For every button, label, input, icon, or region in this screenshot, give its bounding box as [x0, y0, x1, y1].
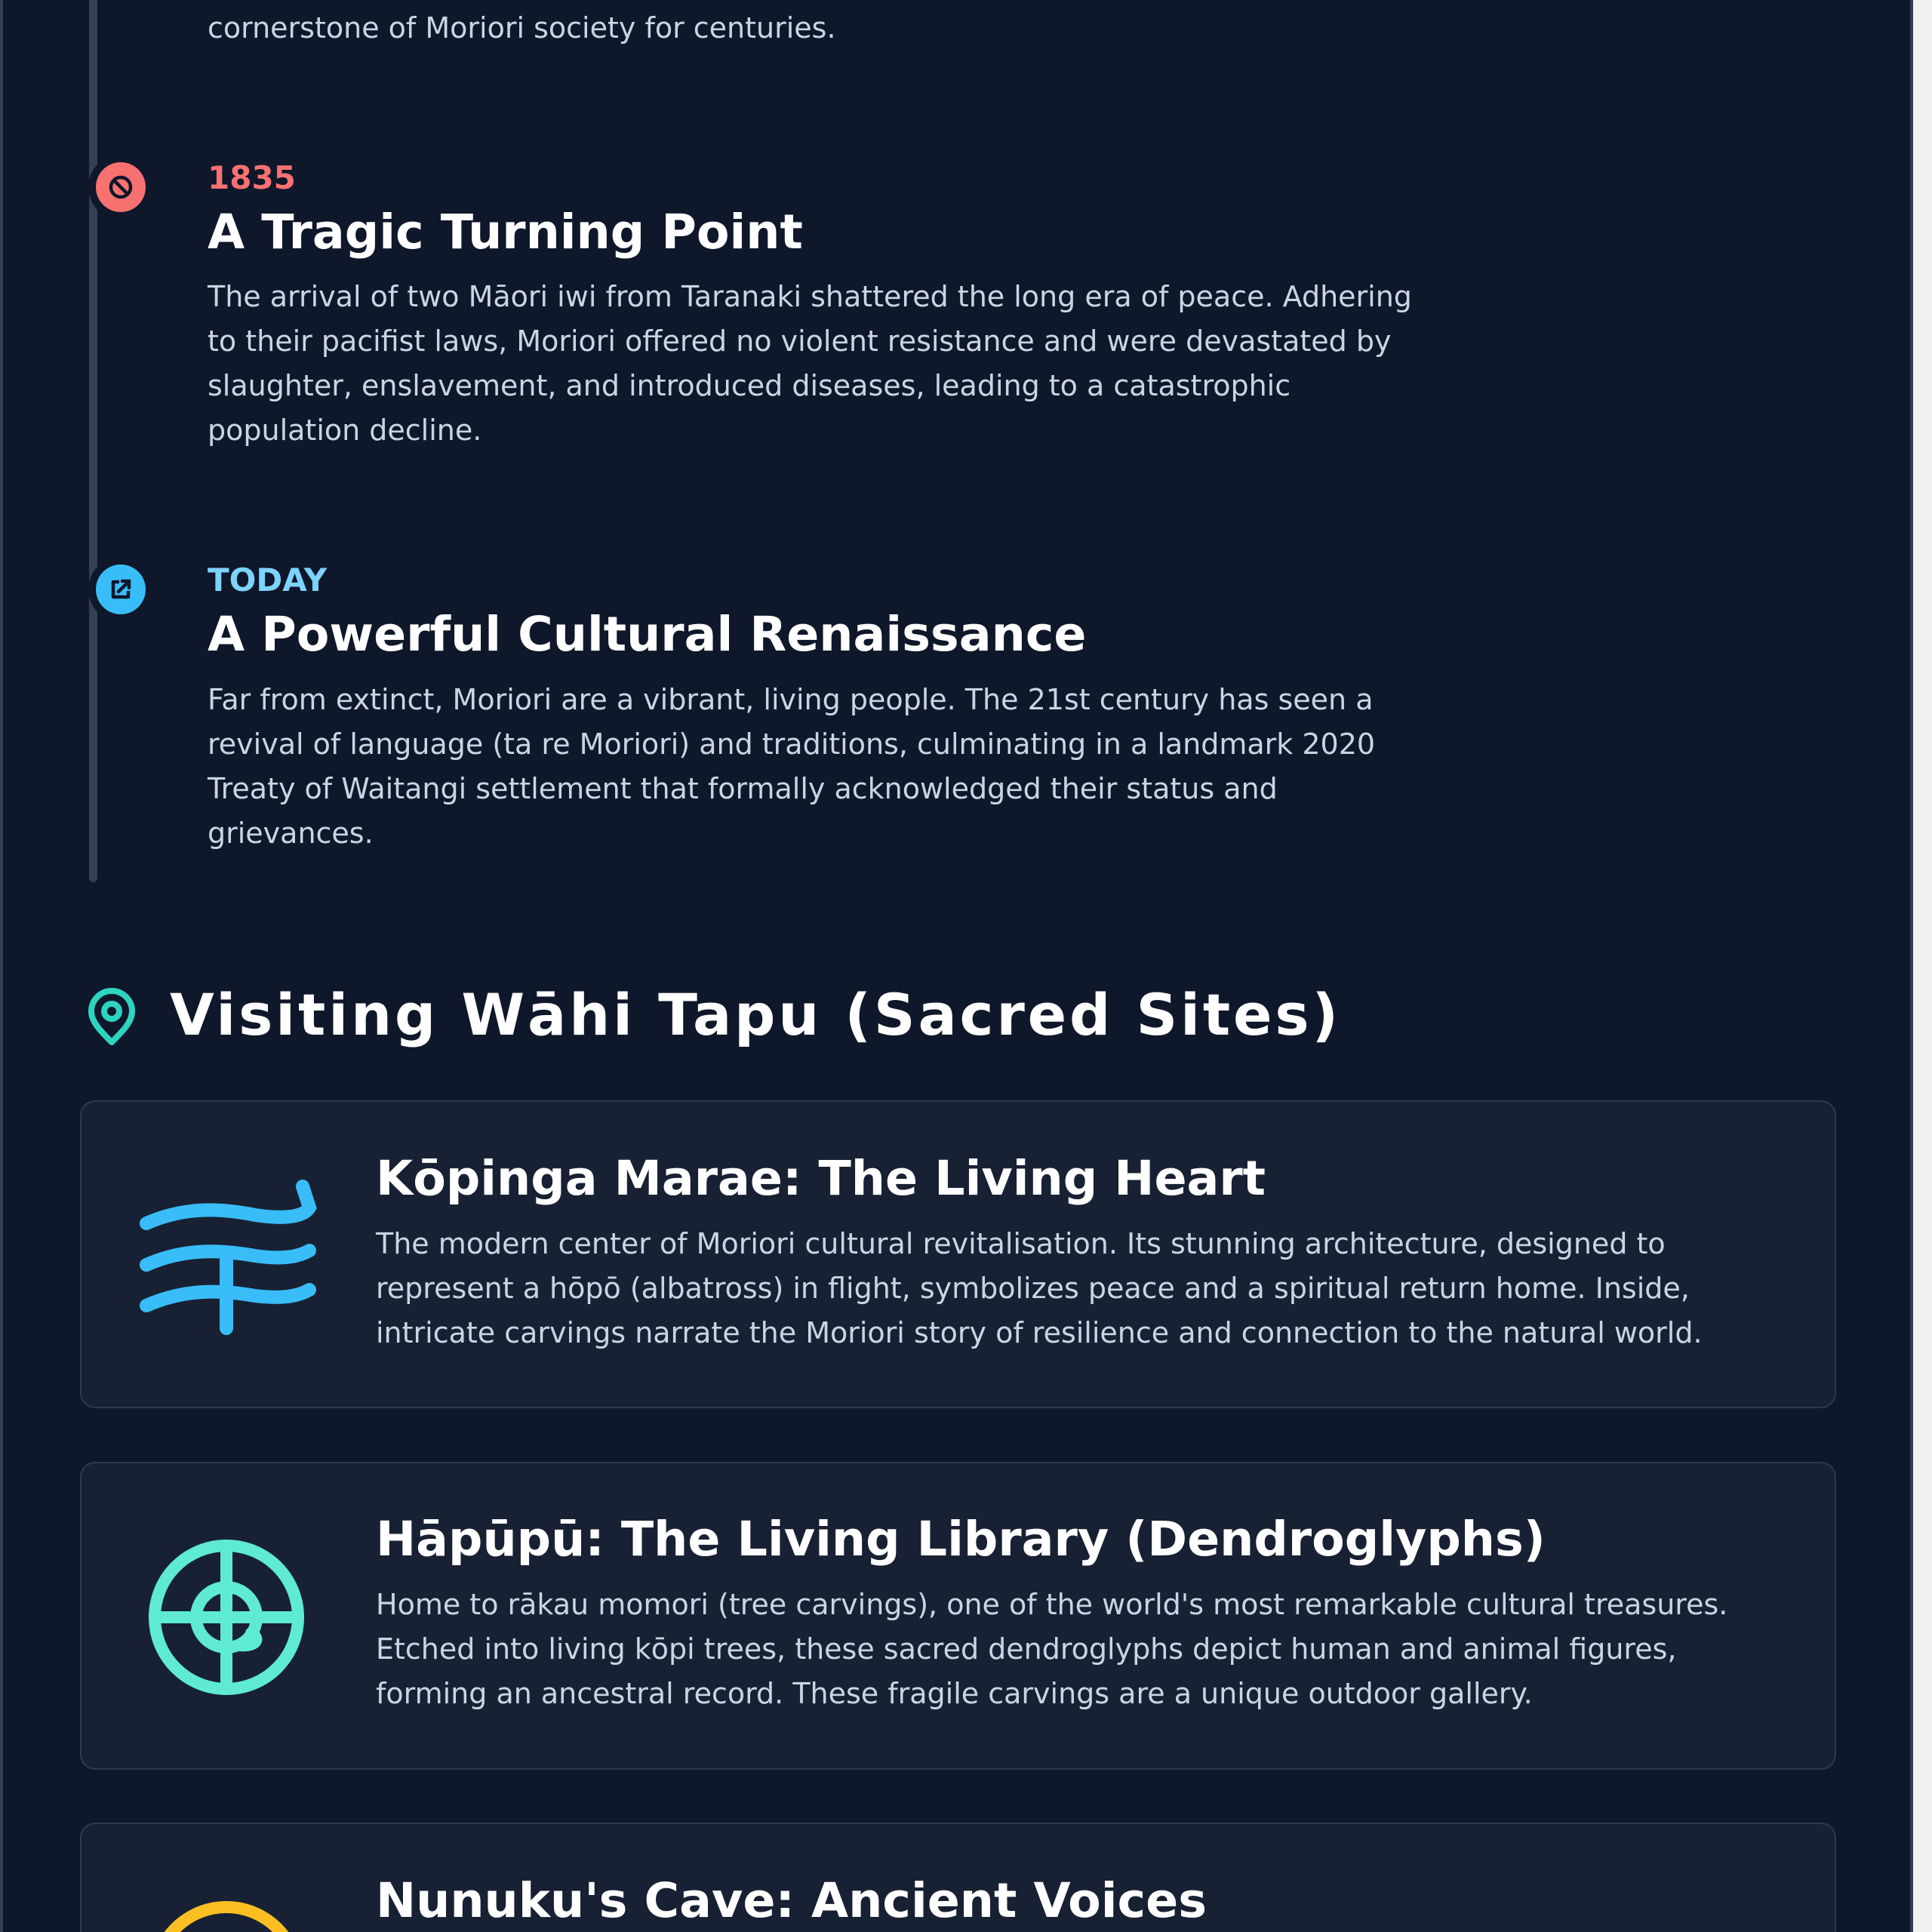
text: card 1: intricate carvings narrate the Moriori story of resilience and connection to the natural world.: [376, 1316, 1703, 1349]
heading: A Tragic Turning Point: A Tragic Turning Point: [208, 204, 803, 260]
text: card 2: [376, 1588, 1727, 1710]
text: 1835 description: population decline.: [208, 414, 481, 447]
text: today description: revival of language (ta re Moriori) and traditions, culminating in a landmark 2020: [208, 728, 1375, 761]
heading: card 1: Kōpinga Marae: The Living Heart: [376, 1150, 1266, 1206]
text: card 1: The modern center of Moriori cultural revitalisation. Its stunning architecture, designed to: [376, 1227, 1666, 1260]
text: previous entry ending: cornerstone of Moriori society for centuries.: [208, 11, 836, 45]
icon: cave circle: [165, 1901, 288, 1932]
card: Nunuku's Cave: [80, 1823, 1836, 1932]
card: Hapupu: [80, 1462, 1836, 1770]
text: today description: Treaty of Waitangi settlement that formally acknowledged their status and: [208, 772, 1278, 805]
timeline line: [89, 0, 97, 882]
icon: today external link: [96, 565, 146, 614]
label: TODAY: TODAY: [208, 561, 327, 598]
text: today description: grievances.: [208, 817, 374, 850]
heading: card 2: Hāpūpū: The Living Library (Dendroglyphs): [376, 1511, 1546, 1567]
text: 1835 description: slaughter, enslavement, and introduced diseases, leading to a catastrophic: [208, 369, 1291, 402]
text: 1835 description: to their pacifist laws, Moriori offered no violent resistance and were devastated by: [208, 325, 1391, 358]
text: today description: [207, 683, 1375, 850]
icon: 1835 ban: [96, 162, 146, 212]
icon: dendroglyph target: [149, 1540, 304, 1695]
label: 1835: 1835: [208, 159, 296, 196]
text: 1835 description: The arrival of two Māori iwi from Taranaki shattered the long era of peace. Adhering: [208, 280, 1412, 313]
text: card 2: Etched into living kōpi trees, these sacred dendroglyphs depict human and animal figures,: [376, 1632, 1676, 1666]
heading: card 3: Nunuku's Cave: Ancient Voices: [376, 1872, 1207, 1928]
text: 1835 description: [207, 280, 1412, 447]
icon: waves: [140, 1180, 317, 1335]
heading: A Powerful Cultural Renaissance: A Powerful Cultural Renaissance: [208, 606, 1087, 662]
card: Kopinga Marae: [80, 1100, 1836, 1408]
section heading: Visiting Wāhi Tapu (Sacred Sites): [170, 981, 1341, 1048]
text: today description: Far from extinct, Moriori are a vibrant, living people. The 21st century has seen a: [208, 683, 1373, 716]
icon: location pin: [88, 988, 135, 1045]
text: card 1: represent a hōpō (albatross) in flight, symbolizes peace and a spiritual return home. Inside,: [376, 1272, 1690, 1305]
text: card 2: Home to rākau momori (tree carvings), one of the world's most remarkable cultural treasures.: [376, 1588, 1727, 1621]
text: card 2: forming an ancestral record. These fragile carvings are a unique outdoor gallery.: [376, 1677, 1533, 1710]
text: card 1: [376, 1227, 1703, 1349]
